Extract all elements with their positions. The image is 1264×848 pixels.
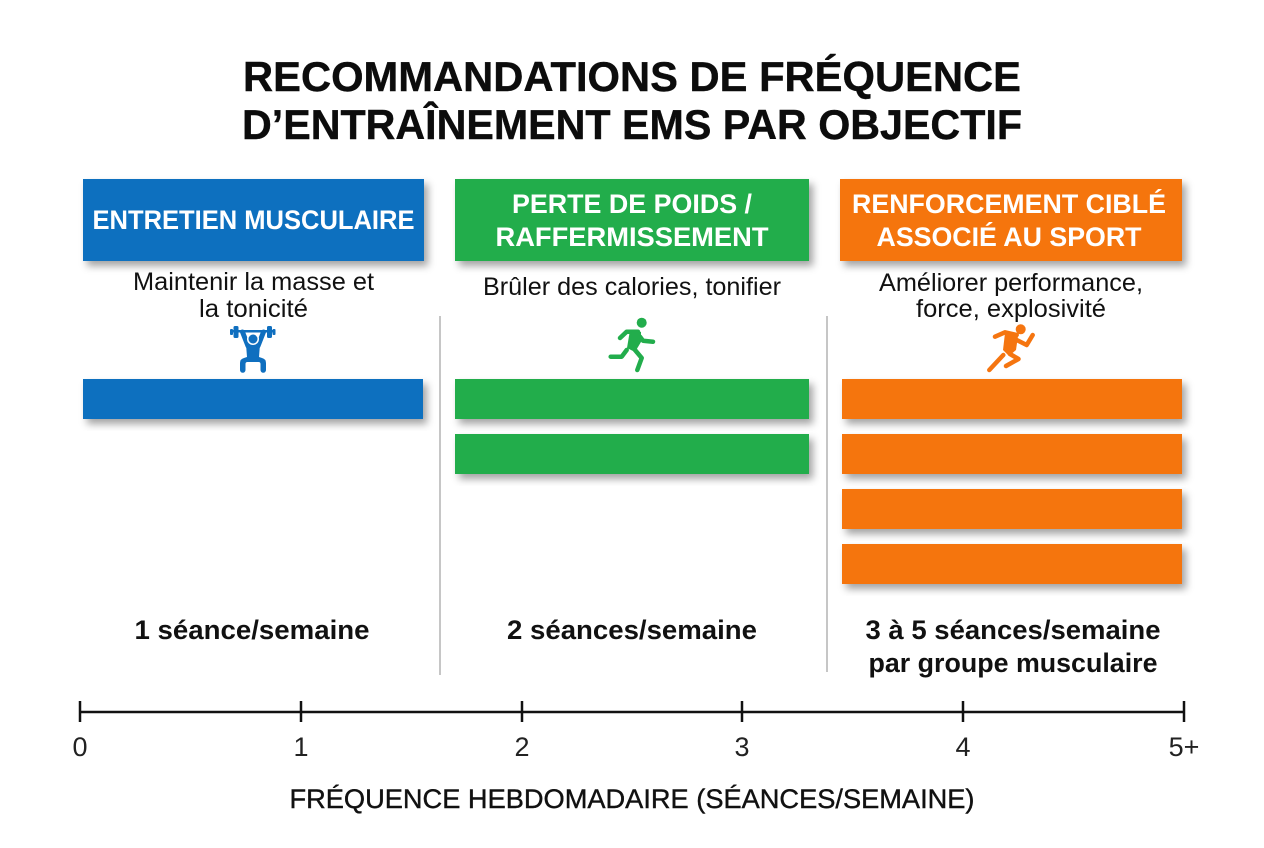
bar: session 3: [842, 489, 1182, 529]
panel: renforcement: [840, 179, 1182, 678]
bar: session 2: [842, 434, 1182, 474]
title: RECOMMANDATIONS DE FRÉQUENCE: [243, 53, 1021, 100]
label: 1 séance: 1 séance/semaine: [134, 615, 370, 645]
description: perte de poids: Brûler des calories, tonifier: [483, 273, 781, 301]
axis: weekly frequency: 2: [514, 732, 530, 762]
axis: weekly frequency: 5+: [1169, 732, 1199, 762]
header: entretien musculaire: ENTRETIEN MUSCULAIRE: [92, 205, 414, 235]
axis: weekly frequency: 0: [72, 732, 88, 762]
label: 3 à 5 séances: 3 à 5 séances/semaine: [866, 615, 1160, 645]
icon: weightlifter: [230, 326, 276, 373]
icon: runner orange: [989, 324, 1033, 370]
axis: weekly frequency: 3: [734, 732, 750, 762]
axis: weekly frequency: 4: [955, 732, 971, 762]
description: renforcement: [879, 269, 1143, 323]
axis: weekly frequency: 1: [293, 732, 309, 762]
header: perte de poids: [455, 179, 809, 261]
header: renforcement: RENFORCEMENT CIBLÉ: [852, 188, 1166, 219]
bar: session 4: [842, 544, 1182, 584]
panel: entretien musculaire: [83, 179, 424, 645]
label: 2 séances: 2 séances/semaine: [507, 615, 757, 645]
description: entretien: [133, 268, 374, 323]
bar: session 1: [455, 379, 809, 419]
header: perte de poids: RAFFERMISSEMENT: [496, 222, 769, 252]
description: entretien: Maintenir la masse et: [133, 268, 374, 296]
title: D’ENTRAÎNEMENT EMS PAR OBJECTIF: [242, 100, 1022, 148]
axis title: FRÉQUENCE HEBDOMADAIRE (SÉANCES/SEMAINE): [290, 784, 974, 814]
icon: runner green: [611, 318, 653, 370]
header: entretien musculaire: [83, 179, 424, 261]
label: 3 à 5 séances: par groupe musculaire: [868, 648, 1158, 678]
header: perte de poids: PERTE DE POIDS /: [512, 189, 752, 219]
label: 3 à 5 séances: [866, 615, 1160, 678]
description: renforcement: force, explosivité: [916, 295, 1106, 323]
bar: session 1: [842, 379, 1182, 419]
header: renforcement: ASSOCIÉ AU SPORT: [876, 221, 1142, 252]
header: renforcement: [840, 179, 1182, 261]
bar: session 2: [455, 434, 809, 474]
title: [242, 53, 1022, 148]
bar: 1 session: [83, 379, 423, 419]
description: renforcement: Améliorer performance,: [879, 269, 1143, 297]
axis: weekly frequency: [72, 701, 1199, 762]
description: entretien: la tonicité: [199, 295, 308, 323]
panel: perte de poids: [455, 179, 809, 645]
